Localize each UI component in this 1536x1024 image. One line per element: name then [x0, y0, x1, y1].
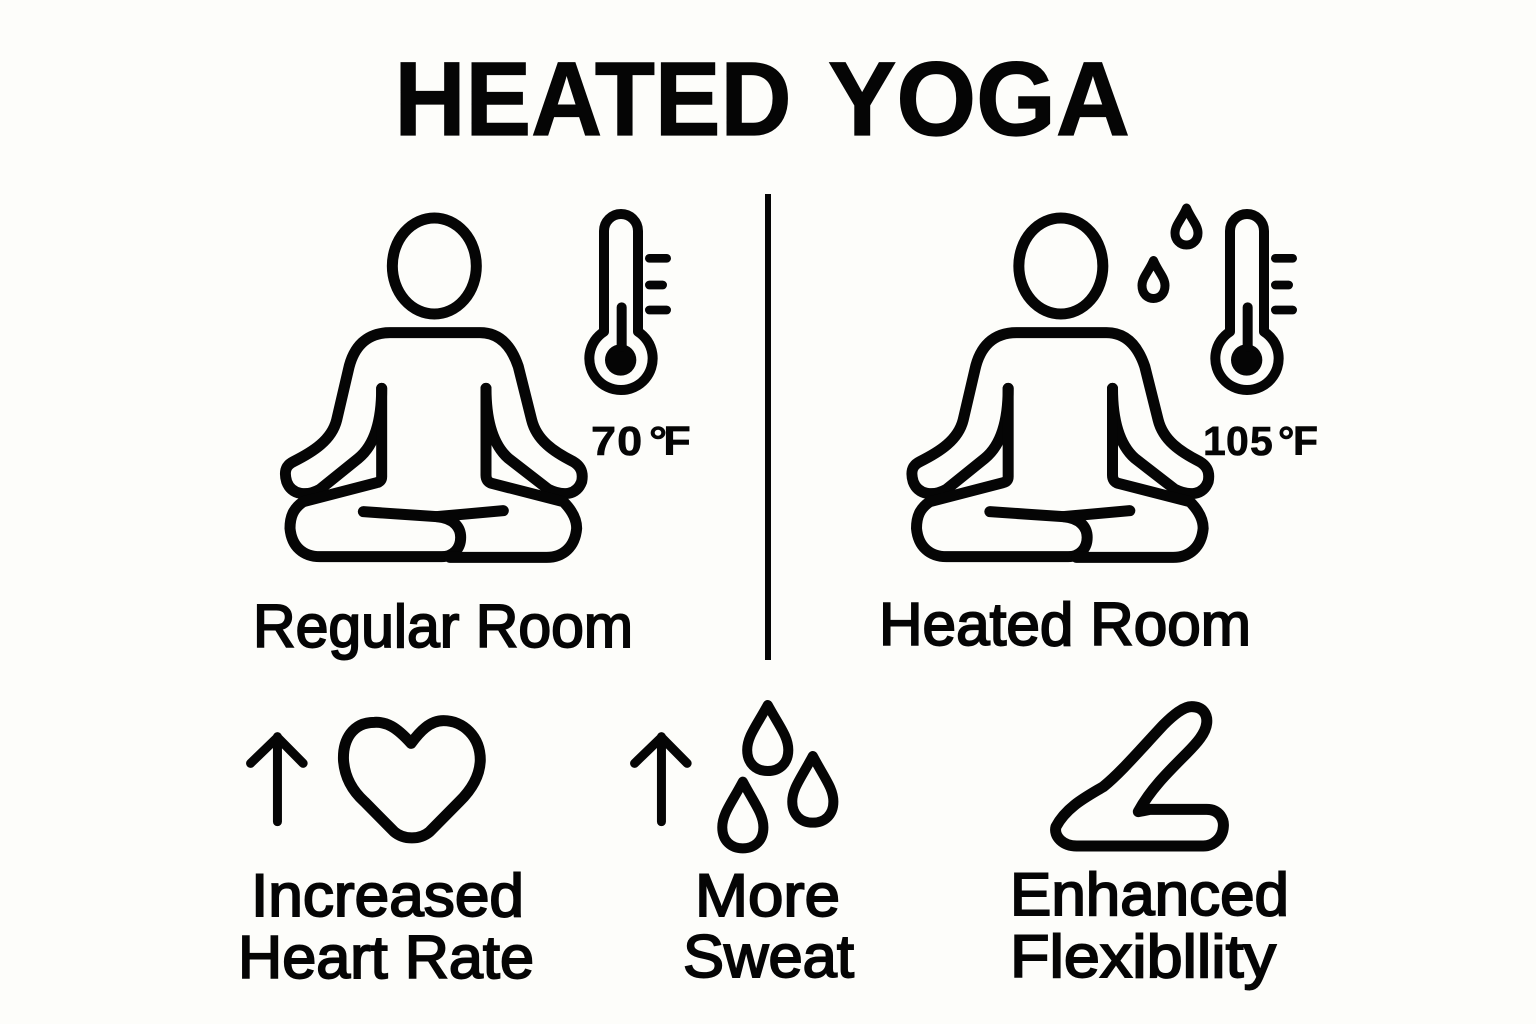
icon: thermometer	[1215, 214, 1293, 390]
label: more sweat: More	[695, 862, 840, 929]
icon: heart	[343, 721, 480, 838]
temperature: 70F: 70°F	[591, 419, 691, 465]
label: increased heart rate: Increased	[251, 862, 524, 929]
divider	[765, 194, 771, 660]
panel: enhanced flexibility	[1010, 707, 1289, 990]
panel: heated room	[879, 208, 1318, 658]
label: more sweat: Sweat	[683, 923, 854, 990]
label: heated room: Heated Room	[879, 591, 1251, 658]
temperature: 105F: 105°F	[1203, 418, 1318, 464]
panel: regular room	[253, 214, 691, 660]
icon: three sweat drops	[722, 705, 833, 848]
title	[394, 41, 1130, 158]
label: enhanced flexibility: Enhanced	[1010, 861, 1289, 928]
label: increased heart rate: Heart Rate	[238, 924, 534, 991]
panel: more sweat	[635, 705, 854, 990]
title: YOGA	[828, 41, 1130, 158]
icon: up arrow	[251, 737, 303, 822]
icon: small sweat drops	[1142, 208, 1198, 298]
title: HEATED	[394, 41, 792, 158]
icon: flexibility pose	[1056, 707, 1223, 846]
icon: meditating figure	[912, 218, 1209, 557]
label: increased heart rate	[238, 862, 534, 991]
icon: meditating figure	[285, 218, 582, 557]
label: regular room: Regular Room	[253, 593, 633, 660]
icon: up arrow	[635, 737, 687, 822]
icon: thermometer	[589, 214, 667, 390]
panel: increased heart rate	[238, 721, 534, 991]
label: more sweat	[683, 862, 854, 990]
label: enhanced flexibility	[1010, 861, 1289, 990]
label: enhanced flexibility: Flexibllity	[1010, 923, 1276, 990]
